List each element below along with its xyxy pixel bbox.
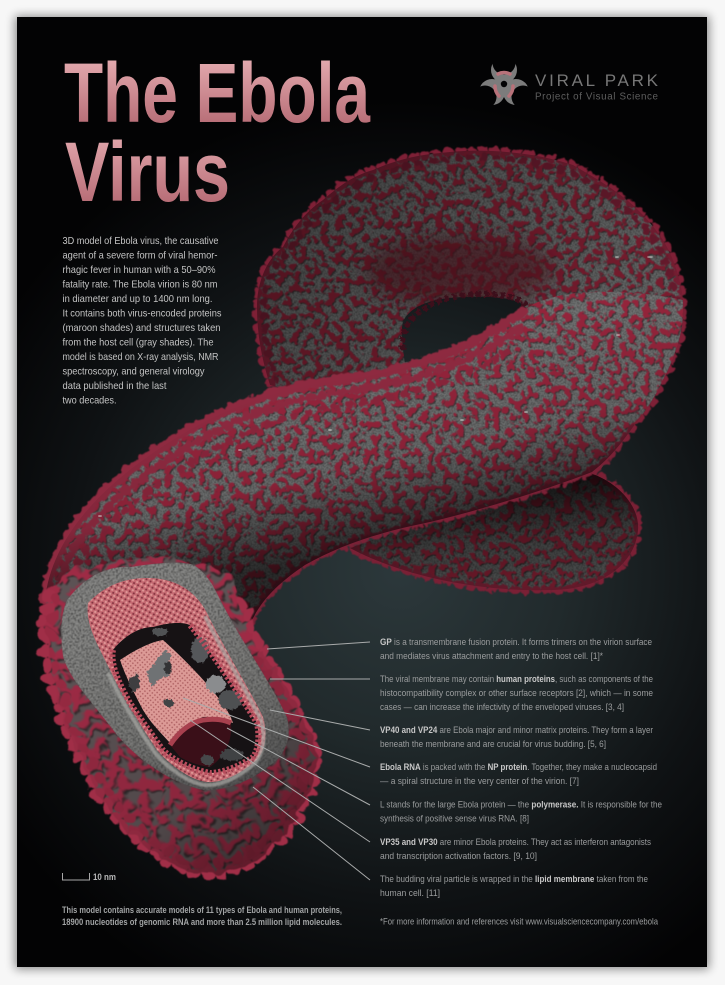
cut-away: nucleocapsid spiral tube bbox=[120, 640, 233, 767]
intro text block: fatality rate. The Ebola virion is 80 nm bbox=[62, 280, 218, 290]
intro text block: 3D model of Ebola virus, the causative bbox=[62, 236, 219, 247]
tube third row of beads bbox=[68, 350, 510, 590]
annotation: VP40 and VP24: VP40 and VP24 are Ebola major and minor matrix proteins. They form a layer bbox=[380, 725, 653, 735]
nucleocapsid opening bbox=[170, 719, 231, 767]
model summary note bbox=[62, 905, 342, 927]
rim of matrix layer bbox=[112, 625, 258, 773]
model summary note: 18900 nucleotides of genomic RNA and more than 2.5 million lipid molecules. bbox=[62, 917, 342, 927]
cut-away: dark virion interior bbox=[112, 623, 258, 773]
title bbox=[64, 46, 371, 219]
scale label: 10 nm bbox=[93, 872, 116, 882]
torus hole inner edge bbox=[403, 294, 527, 350]
model summary note: This model contains accurate models of 11 types of Ebola and human proteins, bbox=[62, 905, 342, 915]
annotation: human proteins: histocompatibility complex or other surface receptors [2], which — in some bbox=[380, 688, 653, 698]
intro text block: two decades. bbox=[62, 396, 116, 406]
annotation: VP40 and VP24: beneath the membrane and are crucial for virus budding. [5, 6] bbox=[380, 739, 606, 749]
annotation: human proteins: The viral membrane may contain human proteins, such as components of the bbox=[380, 674, 653, 684]
cut-away: matrix protein layer bbox=[88, 578, 265, 782]
intro text block: model is based on X-ray analysis, NMR bbox=[62, 352, 219, 363]
title: Virus bbox=[65, 125, 230, 219]
lower loop of virus tube bbox=[350, 473, 638, 590]
upper torus loop with hole bbox=[257, 151, 683, 470]
tube top edge beads bbox=[45, 308, 527, 600]
annotation: Ebola RNA: Ebola RNA is packed with the NP protein. Together, they make a nucleocapsid bbox=[380, 762, 657, 772]
annotation: GP bbox=[380, 637, 652, 661]
annotation: polymerase bbox=[380, 800, 662, 824]
annotation: VP35 and VP30 bbox=[380, 837, 651, 861]
intro text block: data published in the last bbox=[62, 381, 167, 392]
tube second row of beads bbox=[58, 328, 520, 590]
annotation: VP35 and VP30: VP35 and VP30 are minor Ebola proteins. They act as interferon antagonists bbox=[380, 837, 651, 847]
leader lines bbox=[183, 642, 370, 880]
intro text block bbox=[62, 236, 222, 406]
annotation: Ebola RNA: — a spiral structure in the very center of the virion. [7] bbox=[380, 776, 579, 786]
logo tagline: Project of Visual Science bbox=[535, 92, 659, 102]
cut-away: gray lipid membrane bbox=[61, 562, 289, 790]
dense maroon around torus hole bbox=[365, 236, 555, 304]
scale bar bbox=[62, 872, 116, 882]
intro text block: spectroscopy, and general virology bbox=[62, 366, 205, 378]
gray protein clumps inside virion bbox=[128, 628, 244, 765]
tube lower edge beads bbox=[250, 427, 633, 625]
annotation: lipid membrane: The budding viral particle is wrapped in the lipid membrane taken from the bbox=[380, 874, 648, 884]
logo wordmark: VIRAL PARK bbox=[535, 71, 659, 90]
lipid flecks bbox=[98, 256, 653, 517]
annotation: polymerase: synthesis of positive sense virus RNA. [8] bbox=[380, 814, 529, 824]
intro text block: in diameter and up to 1400 nm long. bbox=[62, 294, 212, 305]
annotation: lipid membrane bbox=[380, 874, 648, 898]
virus cap, outer shell with glycoprotein spikes bbox=[42, 557, 316, 875]
annotation: VP40 and VP24 bbox=[380, 725, 653, 749]
second row of torus rim beads bbox=[264, 158, 676, 380]
main virus tube bbox=[45, 256, 683, 700]
panel: virus model bbox=[42, 151, 683, 875]
annotation: polymerase: L stands for the large Ebola protein — the polymerase. It is responsible for the bbox=[380, 800, 662, 810]
intro text block: from the host cell (gray shades). The bbox=[62, 338, 214, 348]
annotation: human proteins: cases — can increase the infectivity of the enveloped viruses. [3, 4] bbox=[380, 702, 624, 712]
annotation: human proteins bbox=[380, 674, 653, 712]
annotation: GP: and mediates virus attachment and entry to the host cell. [1]* bbox=[380, 651, 603, 661]
intro text block: rhagic fever in human with a 50–90% bbox=[62, 265, 216, 276]
intro text block: (maroon shades) and structures taken bbox=[62, 323, 221, 334]
annotation: Ebola RNA bbox=[380, 762, 657, 786]
intro text block: agent of a severe form of viral hemor- bbox=[62, 250, 218, 262]
intro text block: It contains both virus-encoded proteins bbox=[62, 308, 222, 320]
nucleocapsid opening rim bbox=[170, 719, 231, 745]
annotation: GP: GP is a transmembrane fusion protein. It forms trimers on the virion surface bbox=[380, 637, 652, 647]
logo: Viral Park bbox=[480, 64, 658, 105]
icon: biohazard bbox=[480, 64, 528, 105]
torus rim beads bbox=[257, 151, 683, 427]
references note: *For more information and references visit www.visualsciencecompany.com/ebola bbox=[380, 916, 659, 926]
title: The Ebola bbox=[64, 46, 371, 140]
membrane inner highlight bbox=[108, 616, 263, 785]
annotation: VP35 and VP30: and transcription activation factors. [9, 10] bbox=[380, 851, 537, 861]
annotation: lipid membrane: human cell. [11] bbox=[380, 888, 440, 898]
